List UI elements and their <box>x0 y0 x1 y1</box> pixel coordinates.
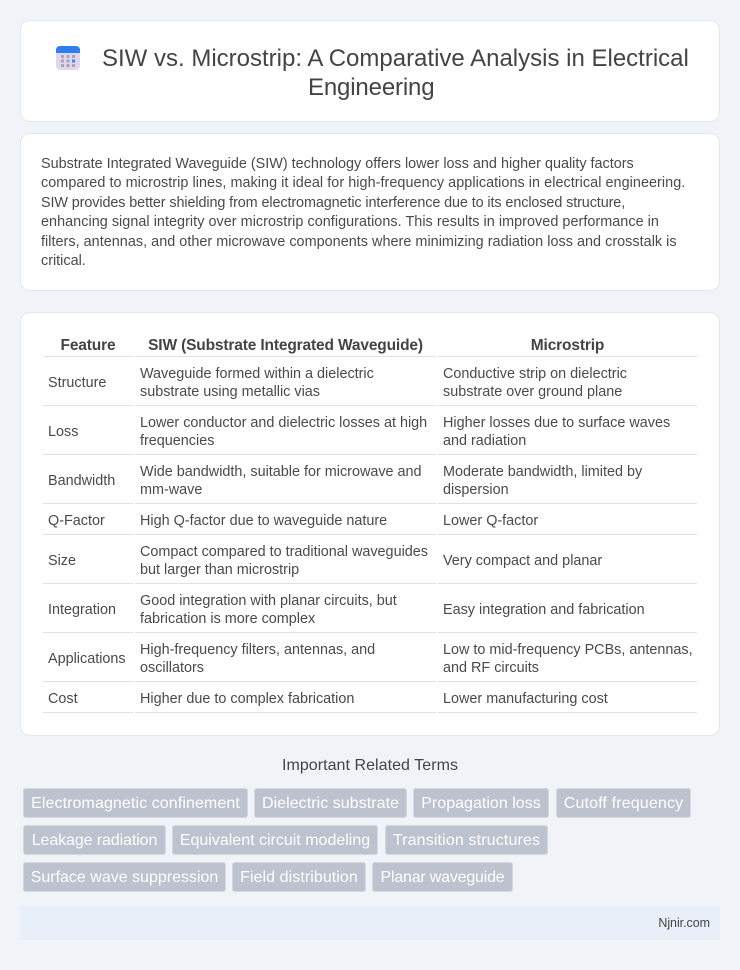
row: Integration: Integration <box>48 602 116 618</box>
row: Loss <box>48 415 670 449</box>
row: Applications: oscillators <box>140 660 204 676</box>
row: Q-Factor: High Q-factor due to waveguide nature <box>140 513 387 529</box>
related terms tags: Equivalent circuit modeling <box>180 832 370 849</box>
row: Structure: substrate over ground plane <box>443 384 622 400</box>
related terms tags: Leakage radiation <box>32 832 157 849</box>
row: Structure: Structure <box>48 375 106 391</box>
title: SIW vs. Microstrip: A Comparative Analysis in Electrical <box>102 45 689 72</box>
row: Structure: Waveguide formed within a dielectric <box>140 366 374 382</box>
row: Bandwidth: mm-wave <box>140 482 202 498</box>
summary text: critical. <box>41 253 86 269</box>
row: Integration: Easy integration and fabrication <box>443 602 645 618</box>
row: Applications <box>48 642 693 676</box>
row: Size: Compact compared to traditional waveguides <box>140 544 428 560</box>
title: Engineering <box>308 74 434 101</box>
summary text: Substrate Integrated Waveguide (SIW) technology offers lower loss and higher quality factors <box>41 156 634 172</box>
summary text: filters, antennas, and other microwave components where minimizing radiation loss and crosstalk is <box>41 234 677 250</box>
summary text: compared to microstrip lines, making it ideal for high-frequency applications in electrical engineering. <box>41 175 685 191</box>
summary text: SIW provides better shielding from electromagnetic interference due to its enclosed structure, <box>41 195 625 211</box>
table header: SIW (Substrate Integrated Waveguide) <box>148 337 423 354</box>
related terms tags: Surface wave suppression <box>31 869 218 886</box>
footer <box>20 906 720 940</box>
related terms tags: Transition structures <box>393 832 540 849</box>
row: Structure <box>48 366 627 400</box>
row: Applications: and RF circuits <box>443 660 539 676</box>
related terms tags: Field distribution <box>240 869 358 886</box>
icon: calendar <box>56 46 80 70</box>
row: Size: Very compact and planar <box>443 553 602 569</box>
related terms tags: Electromagnetic confinement <box>31 795 240 812</box>
row: Structure: substrate using metallic vias <box>140 384 320 400</box>
row: Structure: Conductive strip on dielectric <box>443 366 627 382</box>
row: Applications: High-frequency filters, antennas, and <box>140 642 375 658</box>
summary text: enhancing signal integrity over microstrip configurations. This results in improved performance in <box>41 214 659 230</box>
row: Bandwidth: Wide bandwidth, suitable for microwave and <box>140 464 422 480</box>
panel: comparison table <box>20 312 720 736</box>
row: Loss: Loss <box>48 424 78 440</box>
row: Q-Factor: Q-Factor <box>48 513 105 529</box>
row: Bandwidth: Moderate bandwidth, limited by <box>443 464 642 480</box>
panel: header <box>20 20 720 122</box>
row: Integration: Good integration with planar circuits, but <box>140 593 397 609</box>
table header: Feature <box>61 337 115 354</box>
footer credit: Njnir.com <box>658 916 710 930</box>
row: Q-Factor <box>48 513 538 529</box>
table header: Microstrip <box>531 337 604 354</box>
title <box>102 45 689 101</box>
row: Bandwidth <box>48 464 642 498</box>
related terms tags: Cutoff frequency <box>564 795 683 812</box>
panel: summary <box>20 133 720 291</box>
row: Loss: frequencies <box>140 433 214 449</box>
row: Bandwidth: Bandwidth <box>48 473 115 489</box>
related terms tags: Propagation loss <box>421 795 541 812</box>
row: Loss: and radiation <box>443 433 526 449</box>
row: Cost: Cost <box>48 691 78 707</box>
row: Loss: Lower conductor and dielectric losses at high <box>140 415 427 431</box>
related terms tags <box>23 788 691 892</box>
row: Integration <box>48 593 645 627</box>
row: Size: but larger than microstrip <box>140 562 299 578</box>
row: Integration: fabrication is more complex <box>140 611 315 627</box>
row: Applications: Applications <box>48 651 126 667</box>
row: Q-Factor: Lower Q-factor <box>443 513 538 529</box>
row: Size: Size <box>48 553 76 569</box>
row: Bandwidth: dispersion <box>443 482 509 498</box>
row: Size <box>48 544 602 578</box>
summary text <box>41 156 685 269</box>
row: Applications: Low to mid-frequency PCBs, antennas, <box>443 642 693 658</box>
row: Loss: Higher losses due to surface waves <box>443 415 670 431</box>
related terms tags: Dielectric substrate <box>262 795 399 812</box>
related terms heading: Important Related Terms <box>282 757 458 774</box>
related terms tags: Planar waveguide <box>380 869 504 886</box>
row: Cost: Higher due to complex fabrication <box>140 691 354 707</box>
table header <box>61 337 604 354</box>
row: Cost: Lower manufacturing cost <box>443 691 608 707</box>
row: Cost <box>48 691 608 707</box>
